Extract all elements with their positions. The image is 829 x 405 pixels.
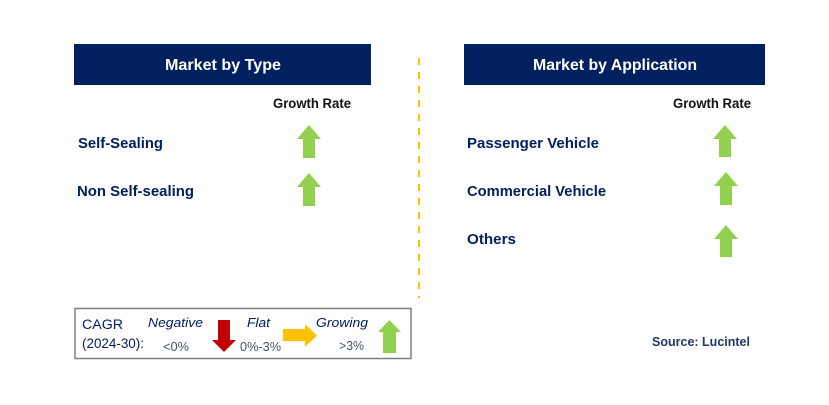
legend: cagr xyxy=(75,308,411,358)
legend title xyxy=(82,317,144,351)
legend item: negative xyxy=(148,315,236,354)
panel: market by type xyxy=(74,44,371,206)
icon: green up arrow xyxy=(714,225,738,257)
column label: growth rate: Growth Rate xyxy=(273,96,351,111)
legend title: (2024-30): xyxy=(82,336,144,351)
legend item: growing: Growing xyxy=(316,315,369,330)
legend item: flat: 0%-3% xyxy=(240,340,281,354)
legend title: CAGR xyxy=(82,317,123,332)
label: commercial vehicle: Commercial Vehicle xyxy=(467,184,606,200)
legend item: negative: Negative xyxy=(148,315,203,330)
divider: dashed vertical line xyxy=(418,58,420,298)
icon: green up arrow xyxy=(714,172,738,205)
legend item: growing xyxy=(316,315,401,353)
heading: market by type: Market by Type xyxy=(165,57,281,74)
legend item: flat: Flat xyxy=(247,315,271,330)
label: others: Others xyxy=(467,232,516,248)
legend item: negative: <0% xyxy=(163,340,189,354)
label: self-sealing: Self-Sealing xyxy=(78,136,163,152)
source note: Source: Lucintel xyxy=(652,334,750,349)
icon: green up arrow xyxy=(297,173,321,206)
heading: market by application xyxy=(464,44,765,85)
panel: market by application xyxy=(464,44,765,257)
label: passenger vehicle: Passenger Vehicle xyxy=(467,136,599,152)
heading: market by type xyxy=(74,44,371,85)
column label: growth rate: Growth Rate xyxy=(673,96,751,111)
icon: green up arrow xyxy=(297,125,321,158)
legend item: growing: >3% xyxy=(339,339,364,353)
icon: green up arrow xyxy=(713,125,737,157)
legend item: flat xyxy=(240,315,317,354)
label: non self-sealing: Non Self-sealing xyxy=(77,184,194,200)
heading: market by application: Market by Application xyxy=(533,57,697,74)
